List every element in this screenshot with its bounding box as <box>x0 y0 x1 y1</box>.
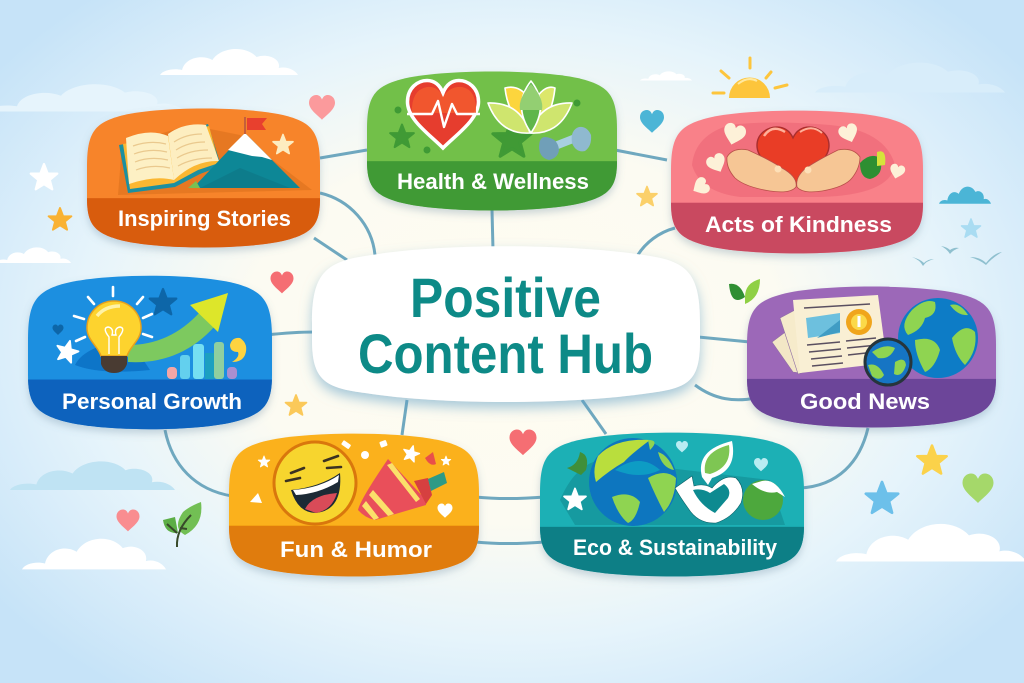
icon: shadow under book and mountain <box>118 125 312 195</box>
icon: dark shape <box>560 460 785 525</box>
icon: newspaper <box>772 295 887 374</box>
label: Good News: Good News <box>800 389 930 414</box>
icon: star <box>273 134 293 154</box>
icon: growth arrow <box>128 293 228 362</box>
icon: two leaves <box>729 279 760 304</box>
icon: mountain with flag <box>188 117 300 188</box>
label: Health & Wellness: Health & Wellness <box>397 169 589 194</box>
icon: leaf <box>860 151 885 179</box>
icon: shadow <box>75 340 150 372</box>
label: Acts of Kindness: Acts of Kindness <box>705 212 892 237</box>
icon: big globe <box>898 298 978 378</box>
icon: yellow mark <box>230 338 246 362</box>
icon: heart with pulse <box>407 80 480 148</box>
bar chart <box>167 342 237 379</box>
icon: lotus <box>488 81 572 133</box>
icon: dark star and heart <box>52 289 176 335</box>
card: Eco & Sustainability <box>540 430 804 579</box>
icon: laughing emoji <box>274 442 356 524</box>
label: Inspiring Stories: Inspiring Stories <box>118 206 291 231</box>
title: Content Hub <box>358 322 653 385</box>
card: Acts of Kindness <box>671 108 923 256</box>
icon: dumbbell <box>539 127 591 160</box>
card: Good News <box>747 284 996 430</box>
card: Health & Wellness <box>367 69 617 213</box>
icon: birds <box>912 246 1002 266</box>
icon: open book <box>119 124 221 193</box>
card: Fun & Humor <box>229 431 479 579</box>
icon: sun <box>713 58 787 98</box>
icon: pale hearts <box>676 441 768 471</box>
icon: small white hearts <box>689 122 906 198</box>
icon: small globe <box>865 339 911 385</box>
label: Personal Growth: Personal Growth <box>62 389 242 414</box>
icon: white star <box>564 488 586 509</box>
icon: dark green stars <box>390 100 580 156</box>
icon: pink blob <box>692 122 895 197</box>
icon: recycle heart with leaf <box>675 441 743 523</box>
icon: sprig <box>163 502 201 547</box>
card: Inspiring Stories <box>87 106 320 250</box>
label: Fun & Humor: Fun & Humor <box>280 537 432 562</box>
icon: earth <box>589 438 677 526</box>
title: Positive <box>410 266 601 329</box>
icon: small green ball <box>743 480 785 520</box>
icon: small leaf <box>567 452 587 475</box>
icon: white star <box>54 338 81 364</box>
label: Eco & Sustainability: Eco & Sustainability <box>573 535 778 560</box>
icon: hands <box>727 149 860 192</box>
icon: light bulb <box>74 287 152 373</box>
title <box>358 266 653 385</box>
icon: confetti <box>250 440 452 518</box>
icon: heart <box>757 127 829 186</box>
central hub panel <box>312 246 700 402</box>
connector lines <box>165 150 868 544</box>
icon: party horn <box>358 459 447 520</box>
card: Personal Growth <box>28 273 272 432</box>
clouds <box>0 49 1024 569</box>
decorative hearts and stars <box>31 95 993 531</box>
